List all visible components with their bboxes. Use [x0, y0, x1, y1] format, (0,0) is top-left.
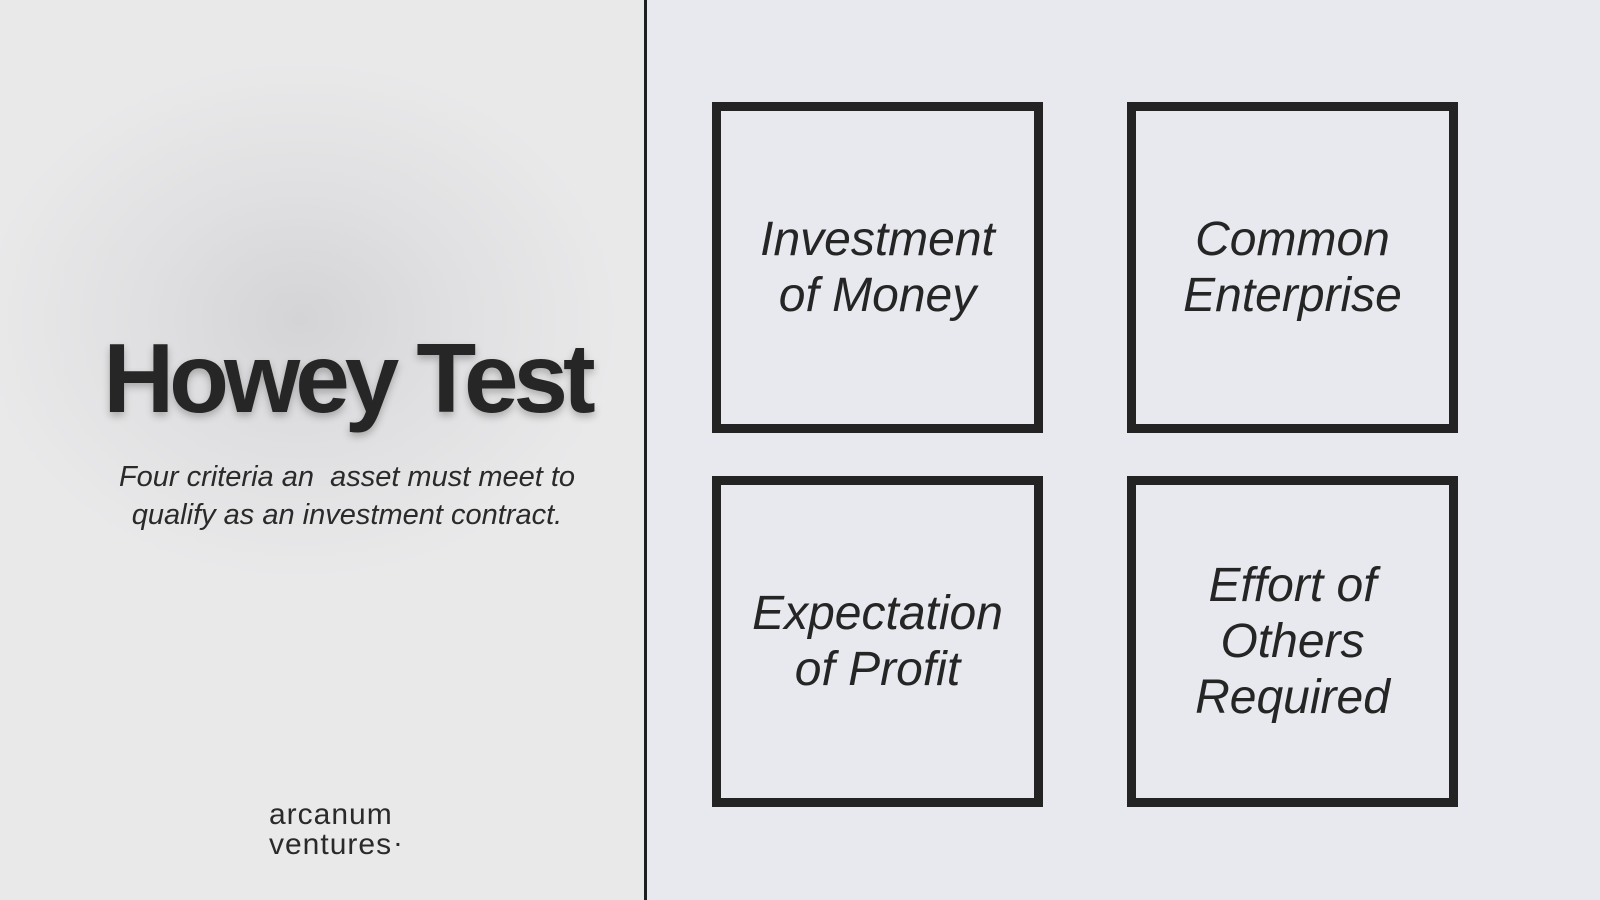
- box: Effort of Others Required: Required: [1195, 670, 1390, 724]
- box: Investment of Money: Investment: [760, 212, 995, 266]
- box: Expectation of Profit: of Profit: [795, 642, 960, 696]
- box: Effort of Others Required: Effort of: [1208, 558, 1377, 612]
- logo: ventures.: [269, 828, 402, 861]
- box: Common Enterprise: [1127, 102, 1458, 433]
- box: Effort of Others Required: Others: [1220, 614, 1365, 668]
- subtitle: Four criteria an asset must meet to: [119, 461, 575, 493]
- logo: [269, 798, 402, 861]
- subtitle: [119, 461, 575, 531]
- box: Effort of Others Required: [1127, 476, 1458, 807]
- subtitle: qualify as an investment contract.: [132, 499, 562, 531]
- box: Common Enterprise: Enterprise: [1183, 268, 1402, 322]
- title: Howey Test: [103, 323, 591, 433]
- box: Investment of Money: of Money: [779, 268, 976, 322]
- panel: left background: [0, 0, 645, 900]
- logo: arcanum: [269, 798, 393, 831]
- box: Expectation of Profit: Expectation: [752, 586, 1003, 640]
- box: Investment of Money: [712, 102, 1043, 433]
- box: Expectation of Profit: [712, 476, 1043, 807]
- box: Common Enterprise: Common: [1195, 212, 1390, 266]
